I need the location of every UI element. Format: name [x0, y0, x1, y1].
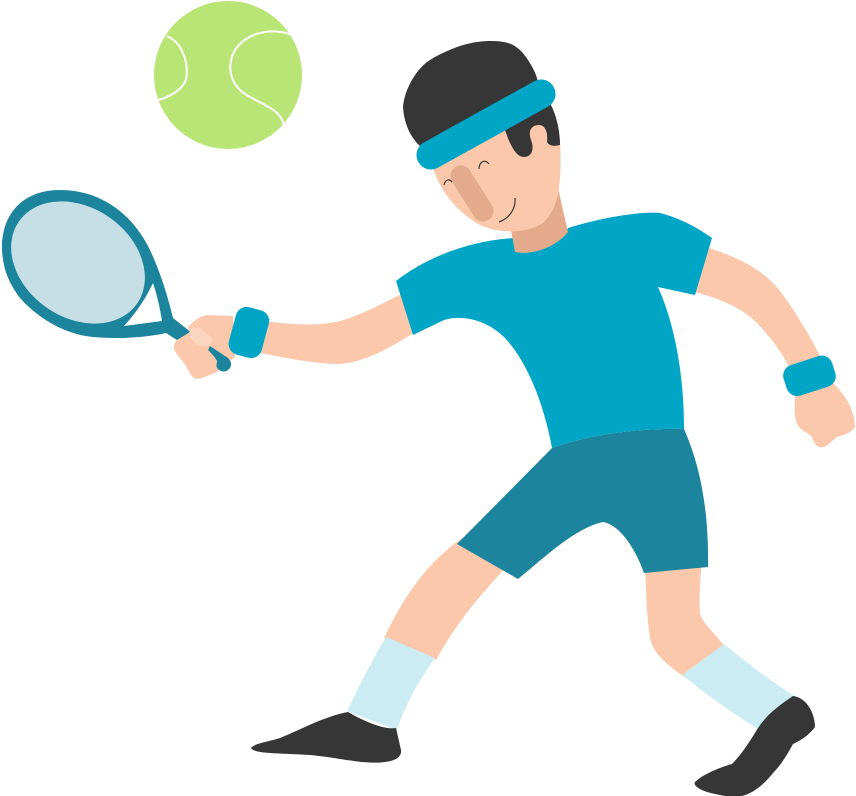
headband: [431, 94, 541, 155]
back leg: [645, 560, 724, 677]
front leg: [384, 538, 508, 660]
head: [403, 41, 561, 231]
front arm: [256, 292, 415, 364]
nose: [461, 176, 483, 211]
back hair: [505, 100, 560, 157]
front shoe: [251, 712, 401, 763]
front wristband: [226, 304, 272, 361]
front hand: [174, 315, 235, 379]
shorts: [457, 429, 708, 579]
neck: [511, 188, 568, 253]
back sock: [682, 644, 794, 729]
back arm: [695, 247, 821, 378]
eyes: [444, 161, 489, 185]
racket: [0, 176, 192, 349]
hair top: [403, 41, 538, 146]
front sock: [347, 637, 435, 730]
racket strings: [0, 176, 169, 349]
shirt: [396, 213, 712, 448]
back wristband: [780, 353, 839, 399]
racket handle: [208, 346, 231, 372]
face: [433, 105, 561, 231]
smile: [499, 198, 515, 222]
back shoe: [695, 696, 815, 796]
tennis ball: [154, 1, 302, 149]
back hand: [795, 383, 855, 447]
